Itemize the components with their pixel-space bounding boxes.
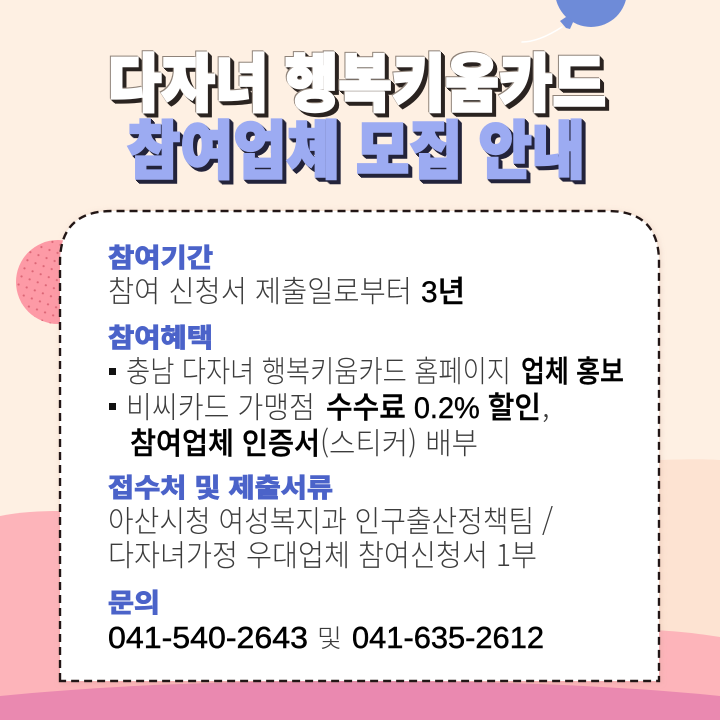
section: participation period	[108, 238, 465, 311]
icon: balloon	[522, 0, 627, 42]
section: contact	[108, 583, 544, 655]
heading: participation period: 참여기간	[108, 238, 213, 275]
bullet: fee discount and sticker	[109, 383, 550, 463]
text: submission office: 아산시청 여성복지과 인구출산정책팀 /	[108, 497, 553, 541]
bullet: homepage promotion: 업체 홍보	[521, 356, 624, 389]
heading: submission: 접수처 및 제출서류	[108, 468, 333, 505]
bullet: homepage promotion: 충남 다자녀 행복키움카드 홈페이지	[126, 347, 511, 391]
background hill: pink left	[0, 511, 420, 720]
section: participation benefits	[108, 318, 624, 463]
background hill: peach right	[380, 459, 720, 720]
text: phone numbers: 041-540-2643	[108, 620, 308, 655]
text: period detail: 참여 신청서 제출일로부터	[108, 267, 412, 311]
section: where to submit and documents	[108, 468, 553, 575]
title line 2: 참여업체 모집 안내	[127, 101, 585, 192]
text: phone numbers: 041-635-2612	[352, 620, 544, 655]
bullet: fee discount and sticker: ,	[542, 383, 550, 427]
text: period detail: 3년	[421, 276, 465, 309]
icon: dotted pink circle	[16, 240, 100, 324]
title	[108, 34, 606, 192]
background hill: pink right	[300, 630, 720, 720]
text: phone numbers: 및	[317, 619, 342, 655]
background hill: bottom magenta	[0, 681, 720, 720]
heading: benefits: 참여혜택	[108, 318, 213, 355]
text: phone numbers	[108, 619, 544, 655]
bullet: fee discount and sticker: (스티커) 배부	[320, 419, 478, 463]
bullet: fee discount and sticker: 비씨카드 가맹점	[126, 383, 315, 427]
bullet: fee discount and sticker: 참여업체 인증서	[130, 428, 320, 461]
text: required documents: 다자녀가정 우대업체 참여신청서 1부	[108, 531, 537, 575]
bullet: fee discount and sticker: 수수료 0.2% 할인	[326, 392, 541, 425]
panel: information card	[60, 211, 659, 681]
heading: contact: 문의	[108, 583, 160, 620]
title line 1: 다자녀 행복키움카드	[108, 34, 606, 125]
